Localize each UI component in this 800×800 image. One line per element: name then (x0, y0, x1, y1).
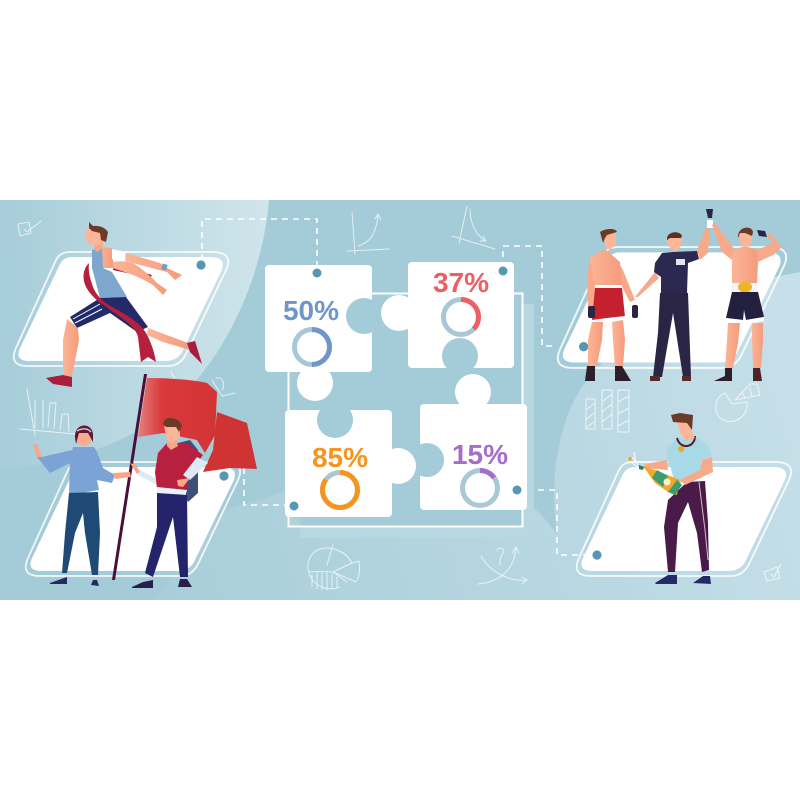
figure: left boxer (585, 229, 638, 381)
icon: small checkbox right (764, 564, 781, 581)
figure: runner (46, 222, 202, 387)
ribbon: finish tape (84, 263, 156, 362)
icon: rising curve chart (347, 212, 389, 254)
puzzle piece: 50% (265, 265, 382, 401)
ring: 37% (444, 300, 478, 334)
ring: 15% (462, 470, 498, 506)
puzzle piece: 37% (381, 262, 514, 374)
icon: pie sketch right (716, 384, 760, 422)
connector: dashed lines (202, 219, 590, 555)
background band (0, 200, 800, 600)
value: 37%: 37% (433, 267, 489, 298)
value: 85%: 85% (312, 442, 368, 473)
puzzle piece: 15% (410, 374, 527, 510)
value: 15%: 15% (452, 439, 508, 470)
ring: 85% (322, 472, 358, 508)
panel: champagne card (577, 462, 791, 576)
figure: flag pole and flags (112, 374, 257, 580)
icon: question and crossing arrows (478, 547, 527, 584)
icon: checkbox top left (18, 221, 41, 236)
icon: bar sketch left (20, 389, 75, 435)
ring: 50% (294, 330, 330, 364)
figure: referee (635, 209, 713, 381)
panel: runner card (14, 252, 228, 366)
panel: boxers card (558, 247, 786, 368)
icon: hatched bars sketch (586, 390, 629, 432)
puzzle: frame behind pieces (288, 294, 534, 538)
figure: man with champagne (627, 413, 713, 584)
figure: woman in hoodie (33, 425, 131, 586)
panel: flag card (26, 462, 240, 576)
decorative sketch icons (18, 206, 781, 590)
puzzle piece: 85% (285, 402, 416, 517)
value: 50%: 50% (283, 295, 339, 326)
icon: hand sketch near flag (171, 372, 235, 396)
figure: right boxer (712, 223, 782, 381)
icon: falling curve chart (452, 206, 495, 249)
icon: pie chart sketch (308, 545, 360, 590)
figure: man with backpack (130, 418, 208, 588)
